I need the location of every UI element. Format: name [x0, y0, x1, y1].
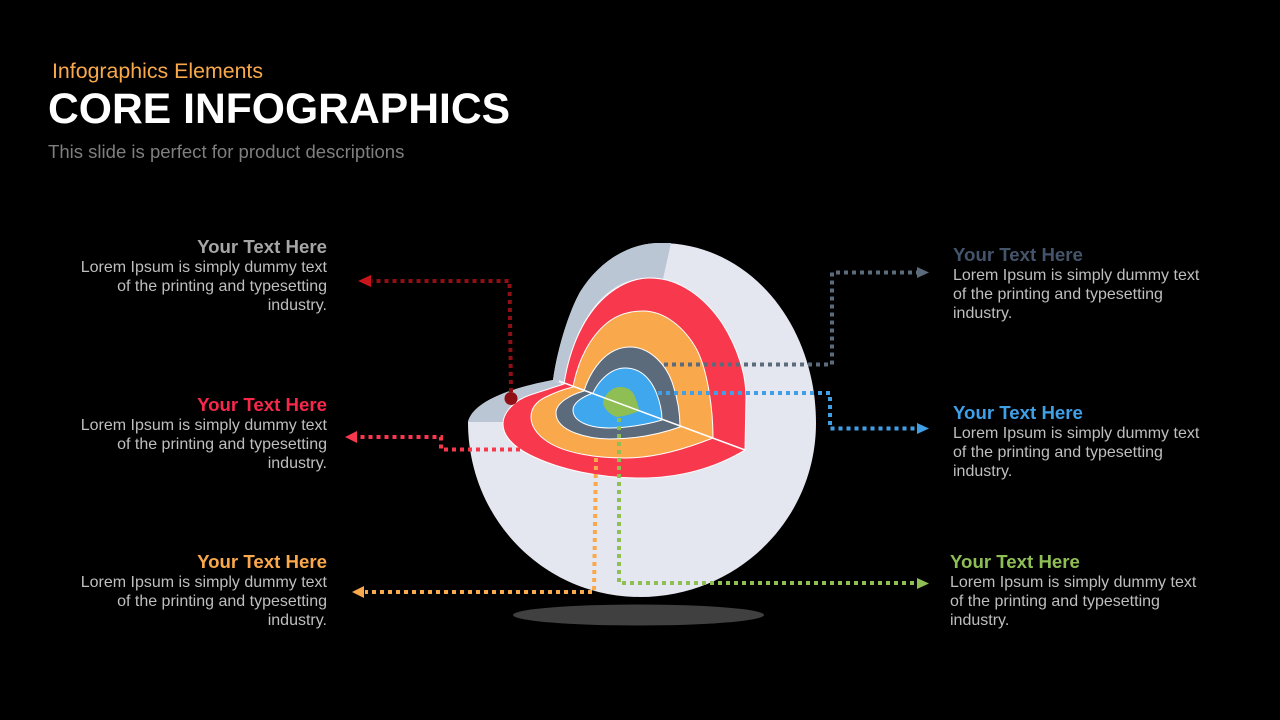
text block: right bottom: industry. [950, 612, 1009, 629]
text block: right bottom: of the printing and typesetting [950, 593, 1160, 610]
eyebrow heading: Infographics Elements [52, 59, 263, 83]
text block: right top: Your Text Here [953, 244, 1083, 265]
text block: left bottom [81, 551, 327, 629]
text block: left top [81, 236, 327, 314]
text block: right middle: industry. [953, 463, 1012, 480]
text block: right bottom [950, 551, 1196, 629]
text block: left bottom: industry. [268, 612, 327, 629]
layer: orange [531, 311, 713, 458]
text block: left middle: industry. [268, 455, 327, 472]
shell cut: lower [468, 380, 564, 422]
text block: right bottom: Lorem Ipsum is simply dummy text [950, 574, 1196, 591]
text block: left bottom: Lorem Ipsum is simply dummy text [81, 574, 327, 591]
text block: right middle: Your Text Here [953, 402, 1083, 423]
text block: right top [953, 244, 1200, 322]
shell cut: upper [553, 243, 671, 384]
connector: dark red [358, 275, 518, 405]
text block: left top: of the printing and typesetting [117, 278, 327, 295]
text block: left top: Your Text Here [197, 236, 327, 257]
subtitle: This slide is perfect for product descriptions [48, 141, 404, 162]
text block: left top: industry. [268, 297, 327, 314]
text block: left bottom: Your Text Here [197, 551, 327, 572]
text block: left bottom: of the printing and typesetting [117, 593, 327, 610]
connector: red [345, 431, 520, 450]
sphere outer shell [468, 243, 816, 597]
cut line [559, 381, 745, 450]
text block: left middle: Your Text Here [197, 394, 327, 415]
connector: orange [352, 458, 596, 598]
text block: right middle: of the printing and typesetting [953, 444, 1163, 461]
text block: right top: of the printing and typesetting [953, 286, 1163, 303]
text block: right top: Lorem Ipsum is simply dummy text [953, 267, 1199, 284]
layer: red mantle [503, 278, 746, 478]
connector: slate [664, 267, 929, 364]
text block: left middle: Lorem Ipsum is simply dummy text [81, 417, 327, 434]
text block: right middle: Lorem Ipsum is simply dummy text [953, 425, 1199, 442]
text block: left middle [81, 394, 327, 472]
layer: slate [556, 347, 680, 439]
layer: green core [603, 387, 639, 417]
title: CORE INFOGRAPHICS [48, 85, 510, 133]
layer: blue [573, 368, 662, 428]
text block: left middle: of the printing and typesetting [117, 436, 327, 453]
text block: right middle [953, 402, 1200, 480]
text block: right bottom: Your Text Here [950, 551, 1080, 572]
connector: blue [658, 393, 929, 434]
ground shadow [513, 604, 764, 626]
text block: right top: industry. [953, 305, 1012, 322]
text block: left top: Lorem Ipsum is simply dummy text [81, 259, 327, 276]
connector: green [619, 418, 929, 589]
